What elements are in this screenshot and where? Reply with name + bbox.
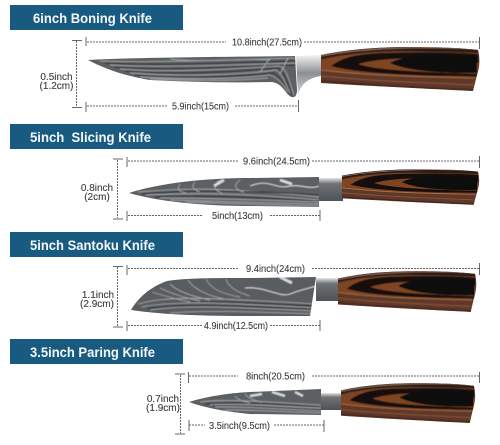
- dimension: paring knife: 0.7inch: [147, 394, 179, 405]
- dimension: santoku knife: 9.4inch(24cm): [246, 264, 305, 275]
- header: 5inch Santoku Knife: [10, 232, 183, 257]
- dimension: paring knife: [146, 372, 480, 434]
- dimension: boning knife: 0.5inch: [40, 72, 73, 83]
- dimension: boning knife: [40, 37, 480, 112]
- dimension: boning knife: 10.8inch(27.5cm): [232, 38, 302, 48]
- dimension: boning knife: (1.2cm): [40, 81, 73, 92]
- dimension: slicing knife: 0.8inch: [81, 183, 113, 194]
- dimension: paring knife: 8inch(20.5cm): [246, 372, 305, 382]
- header: 3.5inch Paring Knife: [10, 339, 183, 364]
- dimension: boning knife: 5.9inch(15cm): [172, 102, 229, 112]
- dimension: paring knife: (1.9cm): [146, 403, 180, 414]
- dimension: santoku knife: 4.9inch(12.5cm): [204, 321, 268, 332]
- dimension: slicing knife: 9.6inch(24.5cm): [243, 156, 310, 168]
- knife: paring knife: [189, 383, 475, 423]
- header: 5inch Slicing Knife: 5inch Slicing Knife: [30, 130, 151, 145]
- dimension: santoku knife: [80, 263, 480, 332]
- dimension: santoku knife: 1.1inch: [82, 290, 114, 301]
- knife: boning knife: [88, 47, 479, 97]
- knife: slicing knife: [129, 169, 479, 207]
- header: 5inch Santoku Knife: 5inch Santoku Knife: [30, 238, 155, 253]
- knife: santoku knife: [131, 271, 476, 316]
- header: 5inch Slicing Knife: [10, 124, 183, 149]
- header: 6inch Boning Knife: 6inch Boning Knife: [33, 11, 152, 26]
- header: 6inch Boning Knife: [10, 5, 183, 30]
- dimension: slicing knife: 5inch(13cm): [212, 211, 263, 222]
- header: 3.5inch Paring Knife: 3.5inch Paring Knife: [30, 345, 155, 360]
- dimension: slicing knife: (2cm): [84, 192, 110, 203]
- dimension: santoku knife: (2.9cm): [80, 299, 114, 310]
- dimension: slicing knife: [81, 156, 480, 222]
- dimension: paring knife: 3.5inch(9.5cm): [209, 421, 270, 432]
